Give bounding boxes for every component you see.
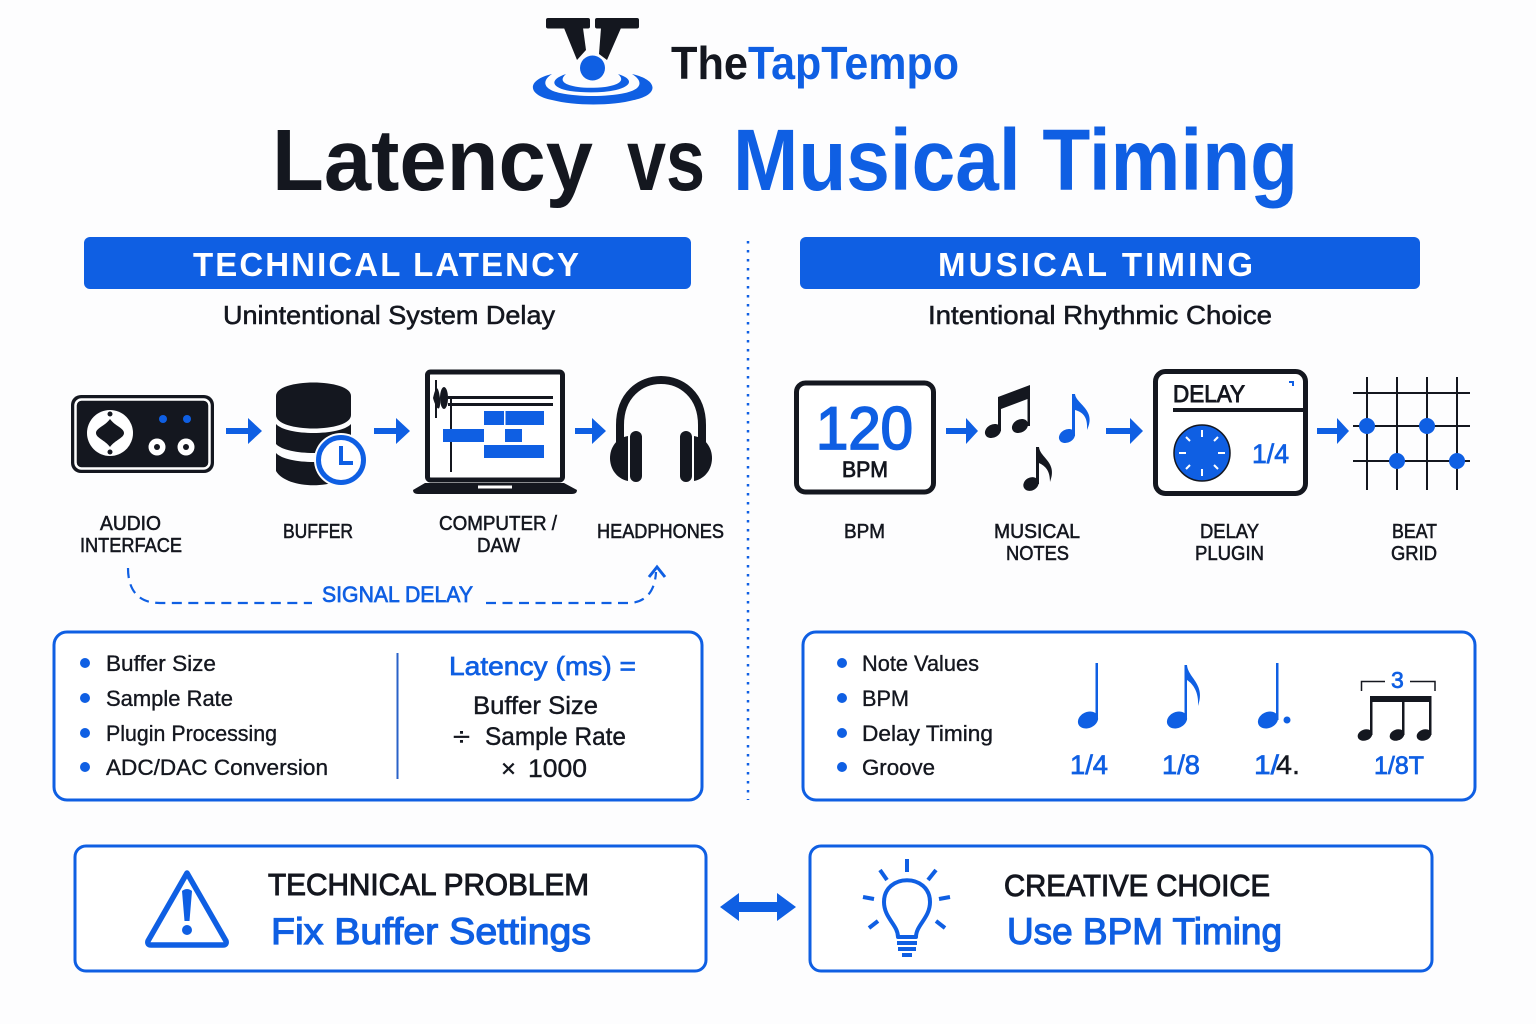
icon: buffer database with clock xyxy=(276,382,368,487)
factor list: ADC/DAC Conversion xyxy=(106,755,328,780)
icon: BPM display: 120 xyxy=(816,395,913,462)
subtitle: technical: Unintentional System Delay xyxy=(223,300,555,330)
note: eighth triplet: 1/8T xyxy=(1374,752,1424,780)
factor list: Buffer Size xyxy=(106,651,216,676)
title: Musical Timing xyxy=(733,112,1298,209)
center dotted divider xyxy=(747,241,749,800)
icon: audio interface xyxy=(71,395,214,473)
labels: timing chain: NOTES xyxy=(1006,543,1069,565)
arrow xyxy=(1106,418,1143,444)
arrow xyxy=(575,418,606,444)
icon: BPM display: BPM xyxy=(842,457,888,482)
labels: signal chain xyxy=(80,513,724,557)
latency formula: Buffer Size xyxy=(473,692,598,720)
icon: light bulb xyxy=(863,859,950,955)
factor list xyxy=(80,651,328,780)
heading: technical latency xyxy=(84,237,691,289)
factor list: Plugin Processing xyxy=(106,721,277,746)
latency formula: Latency (ms) = xyxy=(449,651,636,681)
subtitle: musical: Intentional Rhythmic Choice xyxy=(928,300,1272,330)
icon: delay plugin xyxy=(1156,372,1306,494)
musical factor list: BPM xyxy=(862,686,909,711)
icon: computer laptop with DAW xyxy=(413,372,577,494)
note: quarter: 1/4 xyxy=(1070,750,1108,780)
note: dotted quarter: 1/ xyxy=(1254,750,1280,780)
labels: signal chain: COMPUTER / xyxy=(439,513,557,535)
logo: TheTapTempo: TapTempo xyxy=(748,37,959,89)
labels: timing chain xyxy=(844,521,1437,565)
arrow xyxy=(226,418,262,444)
title: Latency xyxy=(272,112,593,209)
title xyxy=(272,112,1298,209)
signal delay arrow: SIGNAL DELAY xyxy=(322,582,473,607)
arrow xyxy=(1317,418,1349,444)
labels: signal chain: DAW xyxy=(477,535,520,557)
musical factor list: Groove xyxy=(862,755,935,780)
note: quarter xyxy=(1070,663,1108,780)
arrow xyxy=(946,418,978,444)
panel: creative choice: Use BPM Timing xyxy=(1007,911,1282,952)
arrow: double headed xyxy=(720,893,796,921)
latency formula: Sample Rate xyxy=(485,723,626,751)
heading: musical timing: MUSICAL TIMING xyxy=(938,246,1253,283)
panel: technical problem: TECHNICAL PROBLEM xyxy=(268,867,589,902)
labels: signal chain: BUFFER xyxy=(283,521,353,543)
latency formula xyxy=(449,651,636,783)
latency formula: ÷ xyxy=(453,723,470,751)
labels: timing chain: DELAY xyxy=(1200,521,1259,543)
panel: musical factors and note values xyxy=(803,632,1475,800)
panel: technical problem: Fix Buffer Settings xyxy=(271,911,591,952)
labels: timing chain: MUSICAL xyxy=(994,521,1080,543)
note: eighth triplet xyxy=(1356,667,1435,780)
musical factor list xyxy=(837,651,993,780)
factor list: Sample Rate xyxy=(106,686,233,711)
icon: delay plugin: DELAY xyxy=(1173,381,1245,408)
icon: tap tempo mark xyxy=(533,18,653,104)
note: eighth: 1/8 xyxy=(1162,750,1200,780)
signal delay arrow xyxy=(128,567,665,607)
note: dotted quarter: 4. xyxy=(1276,750,1300,780)
labels: timing chain: BEAT xyxy=(1392,521,1437,543)
logo: TheTapTempo xyxy=(533,18,959,104)
labels: timing chain: GRID xyxy=(1391,543,1437,565)
panel: latency factors and formula xyxy=(54,632,702,800)
panel: creative choice xyxy=(810,846,1432,971)
arrow xyxy=(374,418,410,444)
labels: signal chain: AUDIO xyxy=(100,513,161,535)
panel: creative choice: CREATIVE CHOICE xyxy=(1004,868,1270,903)
logo wordmark: The xyxy=(671,37,748,89)
labels: timing chain: PLUGIN xyxy=(1195,543,1264,565)
title: vs xyxy=(627,112,705,209)
labels: signal chain: INTERFACE xyxy=(80,535,182,557)
panel: technical problem xyxy=(75,846,706,971)
labels: timing chain: BPM xyxy=(844,521,885,543)
icon: headphones xyxy=(610,380,712,482)
icon: warning triangle xyxy=(148,873,226,945)
note: eighth xyxy=(1162,665,1200,780)
note: eighth triplet: 3 xyxy=(1391,667,1404,693)
heading: technical latency: TECHNICAL LATENCY xyxy=(193,246,579,283)
note: dotted quarter xyxy=(1254,663,1300,780)
labels: signal chain: HEADPHONES xyxy=(597,521,724,543)
icon: BPM display xyxy=(796,383,934,492)
musical factor list: Delay Timing xyxy=(862,721,993,746)
latency formula: × xyxy=(501,755,516,783)
latency formula: 1000 xyxy=(528,755,587,783)
icon: beat grid xyxy=(1353,377,1470,490)
icon: musical notes xyxy=(982,385,1090,494)
musical factor list: Note Values xyxy=(862,651,979,676)
icon: delay plugin: 1/4 xyxy=(1252,439,1289,469)
heading: musical timing xyxy=(800,237,1420,289)
